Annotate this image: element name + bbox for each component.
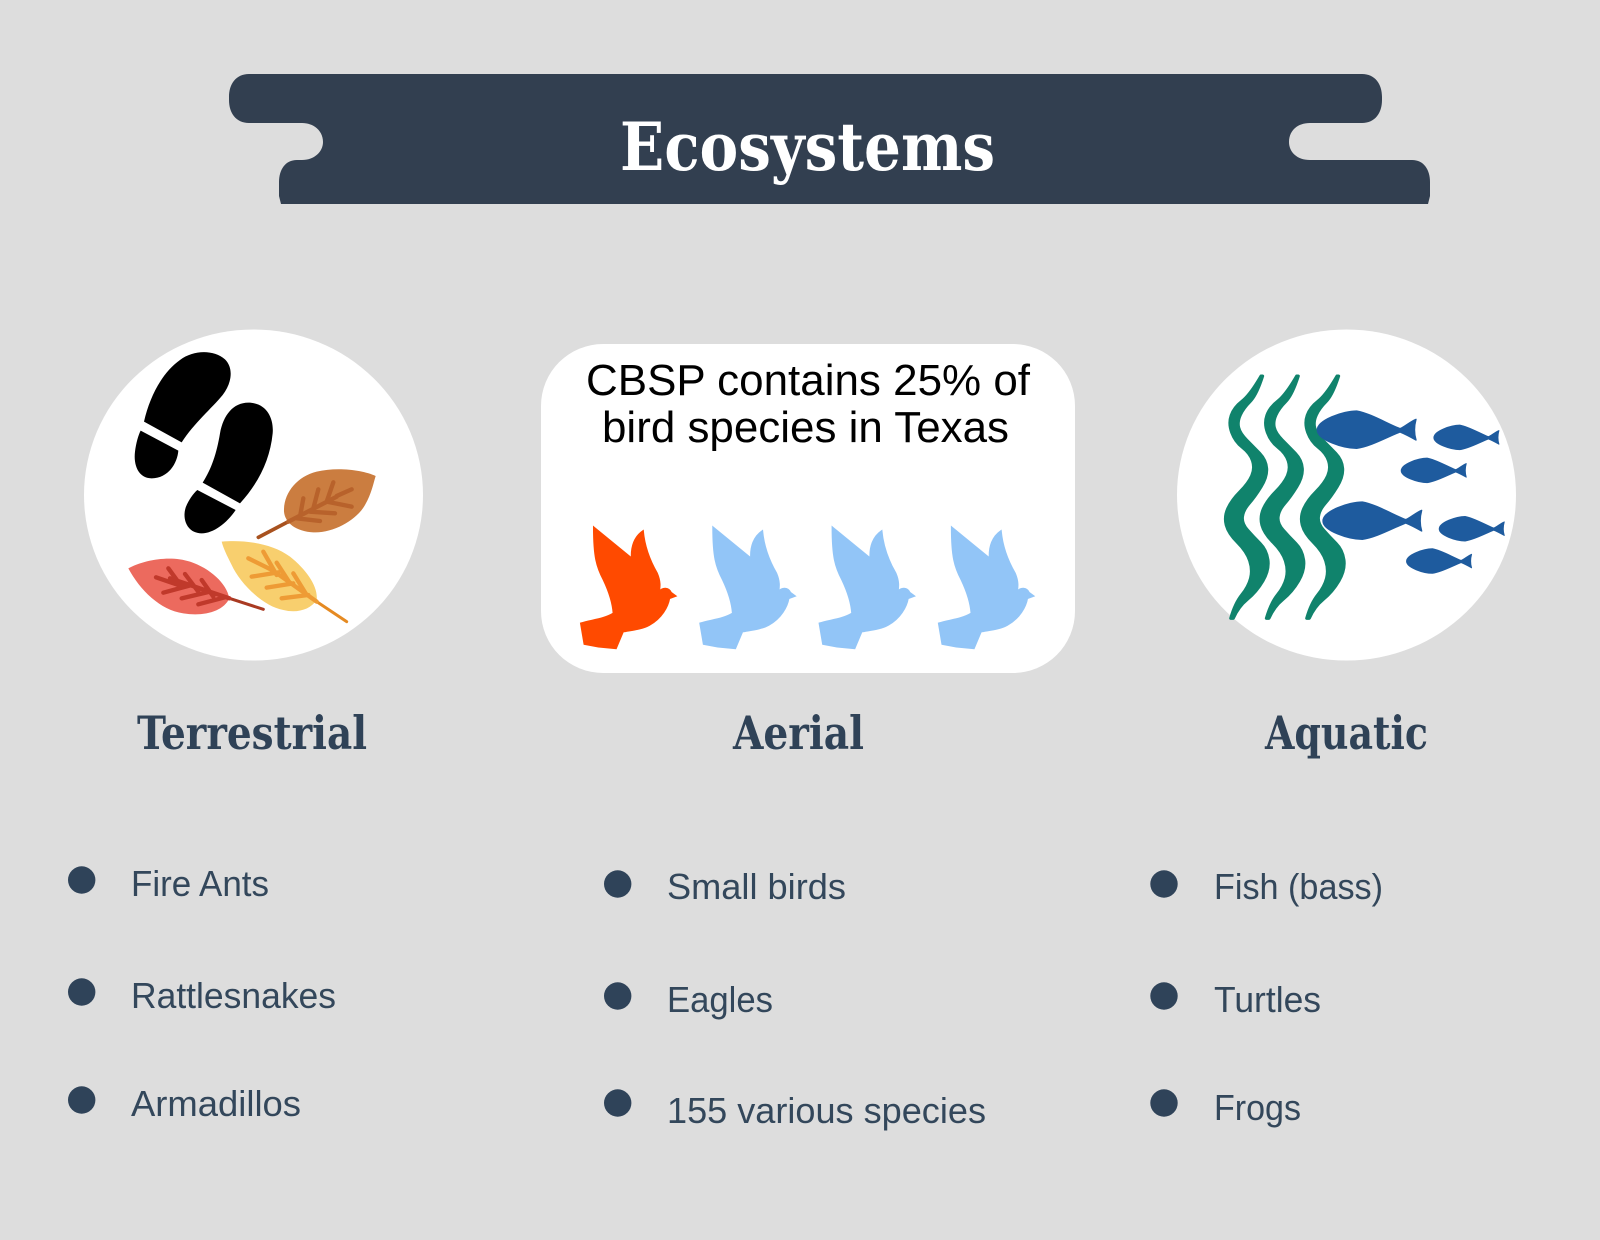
list: aquatic species <box>1150 866 1383 1128</box>
list: terrestrial species <box>68 863 336 1124</box>
icon: blue bird 1 <box>700 527 795 648</box>
list: terrestrial species: Fire Ants <box>131 863 269 904</box>
list: aerial species: 155 various species <box>667 1090 986 1131</box>
heading: Aquatic: Aquatic <box>1264 706 1428 760</box>
icon: blue bird 3 <box>939 527 1034 648</box>
panel: terrestrial icon circle <box>84 330 423 660</box>
title banner <box>229 74 1430 204</box>
list: terrestrial species: Armadillos <box>131 1083 301 1124</box>
callout text <box>586 356 1031 452</box>
list: aerial species <box>604 866 986 1131</box>
heading: Terrestrial: Terrestrial <box>137 706 367 760</box>
panel: aquatic icon circle <box>1177 330 1516 660</box>
icon: footprints <box>135 352 273 533</box>
callout text: CBSP contains 25% of <box>586 356 1031 405</box>
list: terrestrial species: Rattlesnakes <box>131 975 336 1016</box>
list: aerial species: Small birds <box>667 866 846 907</box>
icon: fish school <box>1317 411 1504 573</box>
icon: autumn leaves <box>128 469 376 622</box>
icon: highlighted bird <box>581 527 676 648</box>
list: aquatic species: Turtles <box>1214 979 1321 1020</box>
panel: aerial callout <box>541 344 1075 673</box>
list: aquatic species: Frogs <box>1214 1087 1301 1128</box>
icon: seaweed <box>1225 376 1344 618</box>
callout text: bird species in Texas <box>602 403 1009 452</box>
icon: blue bird 2 <box>819 527 914 648</box>
title: Ecosystems <box>620 108 995 186</box>
list: aquatic species: Fish (bass) <box>1214 866 1383 907</box>
heading: Aerial: Aerial <box>732 706 864 760</box>
list: aerial species: Eagles <box>667 979 773 1020</box>
